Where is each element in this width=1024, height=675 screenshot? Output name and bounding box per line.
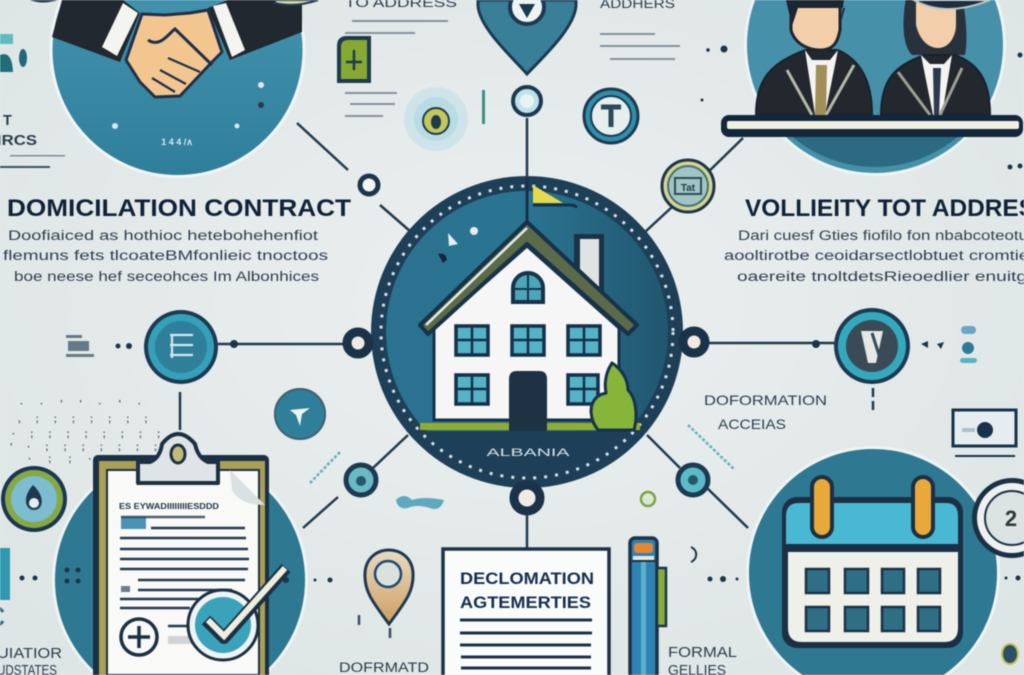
icon: pen — [630, 538, 666, 675]
dot matrix: , ; ; ; ; ; ; ; — [18, 414, 154, 425]
chimney — [574, 234, 604, 294]
top-left teal marks — [0, 34, 65, 168]
icon: date seal — [972, 478, 1024, 558]
text block: validity description: oaereite tnoltdetsRieoedlier enuitg — [737, 269, 1024, 284]
icon: screen — [953, 410, 1016, 457]
clipboard — [93, 434, 269, 675]
label: top-left partial: T — [3, 113, 12, 129]
windows — [456, 326, 600, 404]
teal dash marks — [310, 425, 735, 483]
dot matrix — [10, 399, 166, 465]
house body — [420, 222, 640, 431]
pin: location — [365, 550, 413, 624]
document heading: AGTEMERTIES — [460, 594, 591, 612]
icon: glow coin — [404, 87, 468, 151]
top right dots — [700, 46, 1022, 170]
text block: validity description: Dari cuesf Gties fiofilo fon nbabcoteotu — [738, 228, 1024, 243]
label: doformatd: DOFRMATD — [339, 660, 429, 675]
label: formal — [668, 645, 737, 675]
right mid node — [834, 308, 910, 384]
flag — [527, 178, 576, 226]
bush — [591, 363, 636, 430]
small smudge — [396, 496, 444, 509]
text block: domiciliation description — [3, 228, 328, 284]
top small node — [513, 87, 541, 115]
connector lines — [180, 118, 873, 549]
medallion text: 1 4 4 /∧ — [161, 137, 193, 147]
check badge — [188, 568, 286, 660]
grass — [420, 423, 640, 430]
dot matrix: ' · ; ; ; ; ; ; ; — [10, 442, 163, 453]
panel: top-right representatives circle — [721, 0, 1023, 176]
text block: domiciliation description: Doofiaiced as hothioc hetebohehenfiot — [8, 228, 318, 243]
top center pin icon — [478, 0, 576, 74]
label: information access: DOFORMATION — [704, 392, 827, 408]
icon: date seal: 2 — [1005, 506, 1017, 531]
text block: domiciliation description: flemuns fets tlcoateBMfonlieic tnoctoos — [3, 248, 328, 263]
icon: small left book — [66, 335, 94, 357]
node lower left — [346, 465, 376, 495]
panel: central house emblem — [371, 176, 683, 488]
icon: capsule right — [960, 326, 977, 363]
lower-right badge — [1002, 644, 1018, 664]
right dots — [708, 576, 1020, 582]
panel: calendar circle — [746, 446, 1000, 675]
icon: woman — [881, 0, 990, 115]
icon: green badge — [337, 36, 371, 83]
door — [509, 371, 547, 431]
document heading — [460, 570, 594, 612]
text block: domiciliation description: boe neese hef seceohces Im Albonhices — [14, 269, 319, 284]
text block: validity description — [724, 228, 1024, 284]
left dots — [20, 568, 332, 584]
label: information access — [704, 392, 827, 432]
node lower right — [678, 465, 708, 495]
icon: upper right node: Tat — [681, 183, 696, 194]
roof window — [513, 273, 543, 302]
central connector nodes — [347, 331, 705, 511]
heading: domiciliation contract: DOMICILATION CONTRACT — [7, 195, 351, 222]
panel: top-left medallion edge — [30, 0, 318, 5]
dot matrix: · ; ; ; ; ; ; ; ; — [12, 429, 166, 440]
text block: validity description: aooltirotbe ceoidarsectlobtuet cromtie — [724, 248, 1024, 263]
label: top-left partial — [0, 113, 37, 149]
document heading: DECLOMATION — [460, 570, 594, 588]
left mid node — [144, 310, 218, 384]
mid dots — [116, 340, 944, 349]
label: information access: ACCEIAS — [718, 416, 786, 432]
label: formal: FORMAL — [668, 645, 737, 661]
icon: drop node — [1, 466, 67, 532]
dot matrix: · ; ; · · ; — [28, 454, 139, 465]
dot matrix: · · ' ' · ' · — [20, 399, 148, 410]
panel: clipboard circle — [52, 434, 308, 675]
plus icon — [121, 619, 157, 655]
icon: handshake — [52, 0, 302, 97]
icon: bird node — [274, 388, 326, 440]
panel: declaration document — [443, 549, 609, 675]
panel: handshake circle — [50, 0, 306, 178]
left teal block — [0, 548, 10, 600]
shelf — [721, 115, 1023, 137]
calendar grid — [806, 569, 940, 631]
icon: T node — [584, 89, 638, 143]
icon: man — [756, 0, 872, 115]
green dot — [641, 492, 655, 506]
small ring — [0, 608, 3, 626]
icon: upper right node — [662, 160, 714, 212]
icon: upper left node — [360, 176, 378, 194]
label: albania: ALBANIA — [486, 447, 571, 459]
label: bottom-left — [0, 646, 62, 675]
small text rows top centre — [345, 20, 680, 117]
birds — [438, 227, 478, 263]
clipboard heading: ES EYWADIIIIIIIIESDDD — [119, 501, 219, 511]
